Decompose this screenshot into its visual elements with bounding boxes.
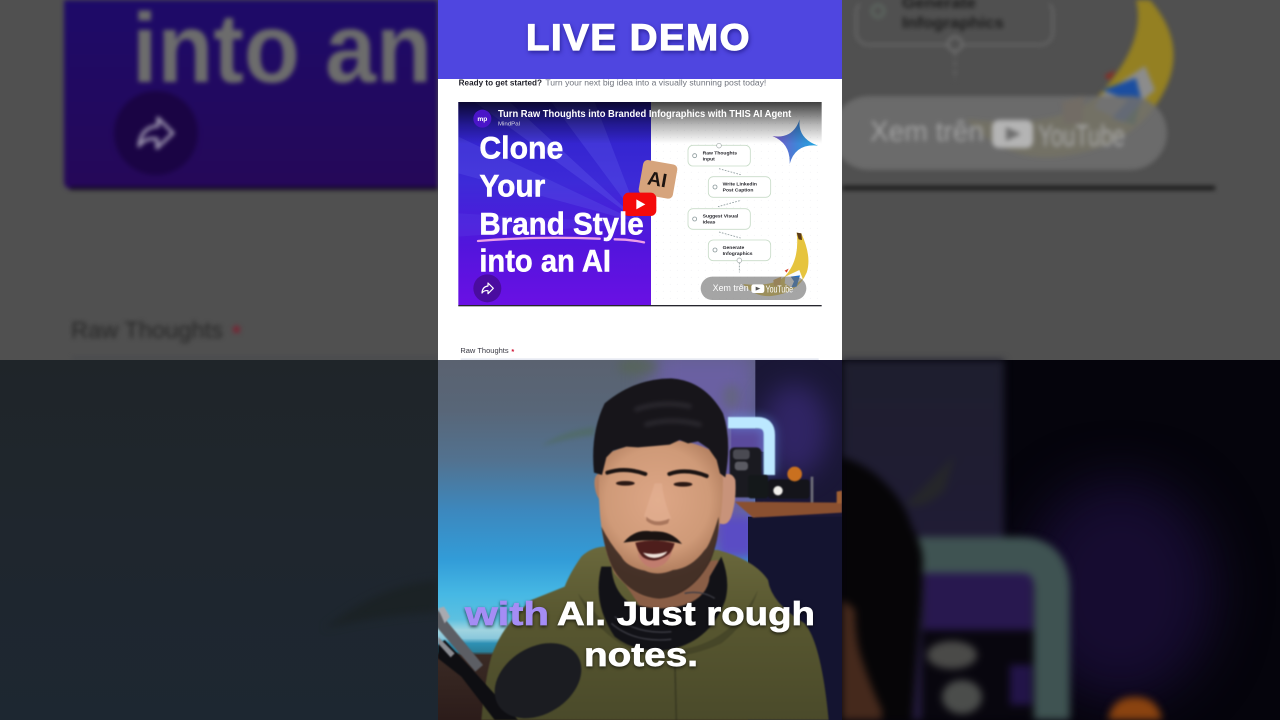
workflow diagram labels: Write LinkedIn <box>723 182 757 188</box>
form field label: raw thoughts: * <box>511 347 514 356</box>
caption: AI. Just rough <box>557 595 815 632</box>
blurred workflow card <box>856 0 1053 80</box>
thumbnail headline <box>479 129 644 279</box>
channel logo text: mp <box>477 116 487 123</box>
intro sentence: Turn your next big idea into a visually stunning post today! <box>545 78 766 88</box>
blurred watch on YouTube pill <box>832 96 1167 170</box>
workflow diagram labels: Suggest Visual <box>703 214 739 220</box>
workflow diagram labels: Infographics <box>723 251 753 257</box>
watch on YouTube pill label: YouTube <box>766 284 793 295</box>
blurred neon tube <box>917 555 1052 720</box>
form field label: raw thoughts: Raw Thoughts <box>460 346 509 355</box>
workflow diagram labels: Input <box>703 156 715 162</box>
blurred share button <box>114 91 198 175</box>
channel name: MindPal <box>498 122 520 128</box>
panel: top demo page <box>438 0 842 360</box>
video title: Turn Raw Thoughts into Branded Infographics with THIS AI Agent <box>498 109 792 120</box>
thumbnail headline: Your <box>479 168 545 204</box>
header banner: live demo: LIVE DEMO <box>526 17 751 58</box>
left blurred backdrop: zoomed thumbnail and form: * <box>232 320 241 346</box>
workflow diagram labels: Raw Thoughts <box>703 150 737 156</box>
left blurred backdrop: zoomed thumbnail and form <box>0 0 438 360</box>
AI sticker label: AI <box>646 168 668 192</box>
blurred thumbnail corner <box>64 0 438 189</box>
header banner: live demo <box>438 0 842 79</box>
form field label: raw thoughts <box>460 346 819 360</box>
watch on YouTube pill label <box>713 283 793 295</box>
blurred hair and ear <box>842 457 923 720</box>
thumbnail headline: Brand Style <box>479 205 644 241</box>
right blurred backdrop: zoomed thumbnail <box>832 0 1280 360</box>
workflow diagram labels: Post Caption <box>723 188 753 194</box>
thumbnail headline: into an AI <box>479 243 611 279</box>
blurred form label: Raw Thoughts <box>71 317 223 343</box>
intro sentence: Ready to get started? <box>459 78 542 88</box>
blurred orange ball <box>1108 697 1162 720</box>
workflow diagram labels: Generate <box>723 245 745 251</box>
watch on YouTube pill label: Xem trên <box>713 283 749 293</box>
blurred watch on YouTube pill: Xem trên <box>870 116 984 148</box>
caption: notes. <box>584 636 698 673</box>
caption: with <box>464 595 549 632</box>
left blurred backdrop: wall <box>0 360 438 720</box>
blurred banana <box>966 0 1174 157</box>
blurred plant leaf <box>905 455 955 506</box>
thumbnail headline: Clone <box>479 129 563 165</box>
blurred watch on YouTube pill: YouTube <box>1038 118 1125 153</box>
blurred workflow card: Infographics <box>902 15 1004 32</box>
caption <box>464 595 815 673</box>
blurred camera <box>927 641 977 669</box>
workflow diagram labels <box>703 150 757 257</box>
presenter video frame <box>436 350 842 720</box>
workflow diagram labels: Ideas <box>703 220 716 226</box>
right blurred backdrop: studio wall, neon light and head <box>842 360 1280 720</box>
video thumbnail embed <box>458 102 822 306</box>
